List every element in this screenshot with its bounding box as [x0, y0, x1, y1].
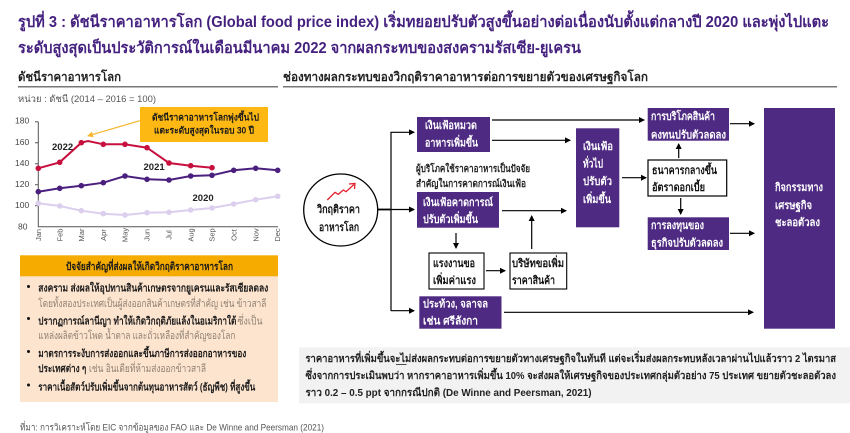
box: general inflation: เพิ่มขึ้น [583, 191, 611, 206]
box: workers ask for higher wages: แรงงานขอ [433, 258, 475, 270]
bullet: meat prices [27, 378, 256, 394]
x axis months [34, 228, 282, 242]
bullet: export restrictions [27, 345, 246, 375]
box: inflation expectations: เงินเฟ้อคาดการณ์ [423, 196, 494, 209]
box: economic activity slows: เศรษฐกิจ [775, 199, 812, 213]
callout: แตะระดับสูงสุดในรอบ 30 ปี [154, 124, 254, 138]
box: food inflation: อาหารเพิ่มขึ้น [425, 134, 478, 150]
bullet: export restrictions: เช่น อินเดียที่ห้ามส่งออกข้าวสาลี [89, 361, 206, 375]
box: workers ask for higher wages [429, 253, 484, 289]
box: investment falls: การลงทุนของ [651, 220, 704, 233]
bullet: war: โดยทั้งสองประเทศเป็นผู้ส่งออกสินค้าเกษตรที่สำคัญ เช่น ข้าวสาลี [38, 296, 266, 310]
box: firms raise prices: บริษัทขอเพิ่ม [512, 255, 564, 270]
panel heading [20, 255, 278, 276]
line chart: food price index [15, 107, 282, 242]
y axis: 80 [18, 222, 28, 232]
box: food inflation [417, 117, 490, 152]
box: central bank raises rates [648, 160, 727, 196]
note panel [299, 347, 850, 403]
box: workers ask for higher wages: เพิ่มค่าแรง [433, 272, 476, 287]
box: general inflation [576, 128, 619, 227]
y axis [15, 116, 278, 232]
bullet: war [27, 280, 268, 310]
box: investment falls [648, 217, 729, 250]
heading: world food price index: ดัชนีราคาอาหารโลก [18, 69, 121, 84]
x axis months: Mar [77, 228, 86, 241]
series 2020 [36, 194, 281, 218]
panel: key factors [20, 255, 278, 402]
box: general inflation: ปรับตัว [583, 175, 612, 188]
x axis months: Dec [273, 228, 282, 242]
text: consumers use food prices: ผู้บริโภคใช้ราคาอาหารเป็นปัจจัย [416, 161, 530, 176]
title [18, 10, 829, 59]
circle: food price crisis: อาหารโลก [319, 220, 359, 234]
series 2021 [36, 166, 281, 194]
bullet: La Nina: ซึ่งเป็น [238, 314, 262, 328]
circle: food price crisis [304, 174, 378, 246]
series labels [52, 142, 214, 204]
box: general inflation: เงินเฟ้อ [583, 140, 613, 153]
note panel: ราว 0.2 – 0.5 ppt จากกรณีปกติ (De Winne and Peersman, 2021) [306, 386, 592, 399]
x axis months: Jul [164, 230, 174, 240]
bullet: La Nina: ปรากฏการณ์ลานีญา ทำให้เกิดวิกฤติภัยแล้งในอเมริกาใต้ [38, 314, 236, 328]
callout [140, 107, 268, 142]
bullet: export restrictions: มาตรการระงับการส่งออกและขึ้นภาษีการส่งออกอาหารของ [38, 345, 246, 360]
x axis months: Nov [252, 228, 260, 242]
circle: food price crisis: วิกฤติราคา [316, 203, 360, 216]
box: inflation expectations: ปรับตัวเพิ่มขึ้น [423, 211, 478, 226]
box: economic activity slows: กิจกรรมทาง [775, 181, 823, 194]
x axis months: Oct [230, 228, 238, 241]
x axis months: Apr [99, 229, 108, 241]
title: รูปที่ 3 : ดัชนีราคาอาหารโลก (Global food price index) เริ่มทยอยปรับตัวสูงขึ้นอย่างต่อเนื่องนับตั้งแต่กลางปี 2020 และพุ่งไปแตะ [18, 10, 829, 33]
title: ระดับสูงสุดเป็นประวัติการณ์ในเดือนมีนาคม 2022 จากผลกระทบของสงครามรัสเซีย-ยูเครน [18, 37, 581, 59]
x axis months: Sep [208, 228, 216, 242]
box: consumption falls: คงทนปรับตัวลดลง [651, 128, 726, 142]
x axis months: Feb [56, 229, 64, 241]
callout arrow [88, 121, 140, 136]
box: economic activity slows: ชะลอตัวลง [775, 216, 820, 229]
box: protests and riots: เช่น ศรีลังกา [423, 314, 478, 328]
series labels: 2020 [192, 193, 214, 204]
y axis: 120 [15, 179, 29, 189]
x axis months: May [120, 228, 130, 242]
box: firms raise prices: ราคาสินค้า [512, 274, 555, 287]
box: investment falls: ธุรกิจปรับตัวลดลง [651, 236, 723, 250]
flow arrows [378, 120, 754, 312]
y axis: 100 [15, 200, 29, 210]
x axis months: Jan [34, 229, 43, 241]
text: consumers use food prices: สำคัญในการคาดการณ์เงินเฟ้อ [416, 177, 526, 190]
box: firms raise prices [510, 253, 567, 289]
box: consumption falls: การบริโภคสินค้า [651, 109, 715, 123]
icon: rising red arrow [327, 184, 354, 200]
box: central bank raises rates: ธนาคารกลางขึ้น [652, 162, 717, 177]
series labels: 2022 [52, 142, 73, 153]
box: economic activity slows [764, 108, 835, 329]
x axis months: Aug [186, 228, 196, 242]
box: protests and riots: ประท้วง, จลาจล [423, 298, 488, 310]
box: protests and riots [419, 296, 502, 329]
bullet: La Nina: แหล่งผลิตข้าวโพด น้ำตาล และถั่วเหลืองที่สำคัญของโลก [38, 328, 235, 342]
bullet: La Nina [27, 314, 262, 342]
box: inflation expectations [417, 192, 499, 228]
box: general inflation: ทั่วไป [583, 156, 603, 170]
y axis: 180 [15, 116, 29, 126]
heading: transmission channels: ช่องทางผลกระทบของวิกฤติราคาอาหารต่อการขยายตัวของเศรษฐกิจโลก [283, 69, 648, 85]
y axis: 160 [15, 137, 29, 147]
series 2022 [36, 140, 215, 171]
x axis months: Jun [142, 229, 152, 241]
bullet: war: สงคราม ส่งผลให้อุปทานสินค้าเกษตรจากยูเครนและรัสเซียลดลง [38, 280, 268, 296]
callout: ดัชนีราคาอาหารโลกพุ่งขึ้นไป [152, 110, 259, 124]
box: central bank raises rates: อัตราดอกเบี้ย [652, 179, 705, 194]
series labels: 2021 [144, 162, 165, 173]
panel heading: ปัจจัยสำคัญที่ส่งผลให้เกิดวิกฤติราคาอาหารโลก [66, 258, 233, 273]
text: consumers use food prices [416, 161, 530, 190]
bullet: export restrictions: ประเทศต่าง ๆ [38, 363, 87, 375]
box: food inflation: เงินเฟ้อหมวด [425, 119, 477, 132]
bullet: meat prices: ราคาเนื้อสัตว์ปรับเพิ่มขึ้นจากต้นทุนอาหารสัตว์ (ธัญพืช) ที่สูงขึ้น [38, 378, 256, 394]
unit note: หน่วย : ดัชนี (2014 – 2016 = 100) [18, 93, 156, 105]
y axis: 140 [15, 158, 29, 168]
box: consumption falls [648, 108, 729, 142]
